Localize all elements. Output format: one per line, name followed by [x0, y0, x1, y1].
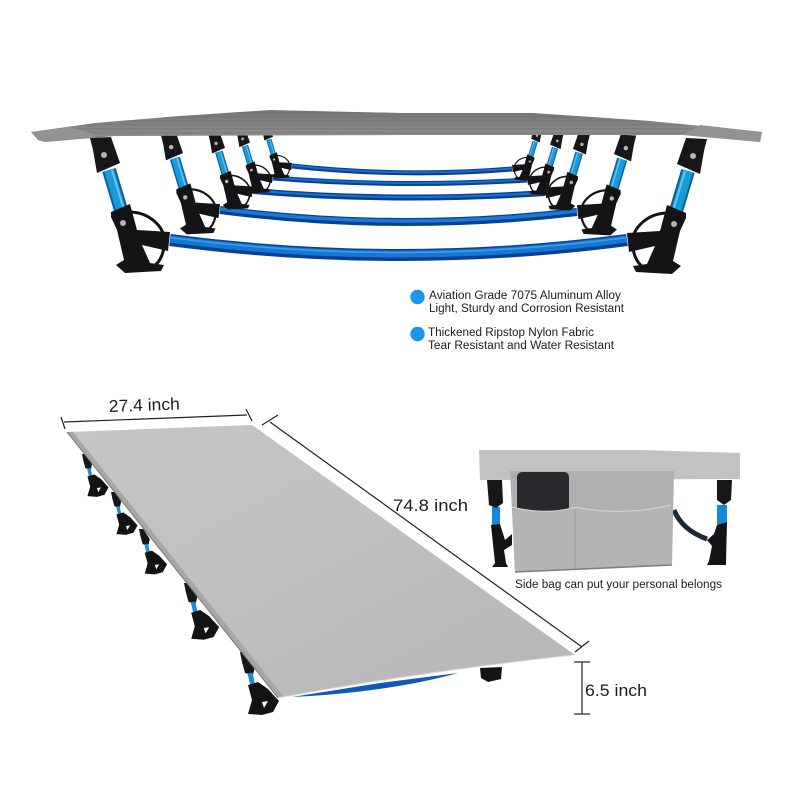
crossbar tubes: [170, 166, 627, 255]
feature list: [410, 290, 625, 352]
feature text: nylon fabric: Tear Resistant and Water Resistant: [428, 340, 615, 352]
phone: [517, 472, 569, 512]
blue frame under cot: [292, 673, 458, 697]
feature text: aluminum alloy: Light, Sturdy and Corrosion Resistant: [429, 303, 625, 315]
left legs: [90, 127, 292, 273]
feature text: nylon fabric: Thickened Ripstop Nylon Fabric: [428, 327, 594, 339]
icon: blue bullet 2: [410, 327, 425, 341]
cot fabric edge view: [31, 110, 762, 142]
dimension: length 74.8 inch: [262, 415, 589, 652]
dimension: height 6.5 inch: 6.5 inch: [585, 681, 647, 700]
panel: perspective view of cot: [67, 425, 575, 715]
panel: side view of cot: [31, 110, 762, 274]
inset cot fabric: [479, 450, 740, 480]
feature text: aluminum alloy: [429, 290, 625, 315]
back foot: [480, 667, 502, 682]
left inset leg: [487, 480, 512, 567]
dimension: height 6.5 inch: [574, 662, 647, 714]
feature text: nylon fabric: [428, 327, 615, 352]
inset caption: Side bag can put your personal belongs: [515, 579, 722, 591]
panel: side bag inset: [479, 450, 740, 591]
cot surface: [67, 425, 575, 698]
feature text: aluminum alloy: Aviation Grade 7075 Aluminum Alloy: [429, 290, 621, 302]
dimension: width 27.4 inch: 27.4 inch: [108, 395, 180, 416]
right inset leg: [707, 480, 732, 565]
connecting tube: [674, 510, 707, 539]
icon: blue bullet 1: [410, 290, 425, 304]
dimension: width 27.4 inch: [61, 395, 252, 429]
dimension: length 74.8 inch: 74.8 inch: [393, 496, 468, 515]
right legs: [512, 129, 707, 274]
perspective legs: [82, 454, 279, 715]
pockets: [512, 505, 672, 572]
side bag: [510, 471, 674, 572]
